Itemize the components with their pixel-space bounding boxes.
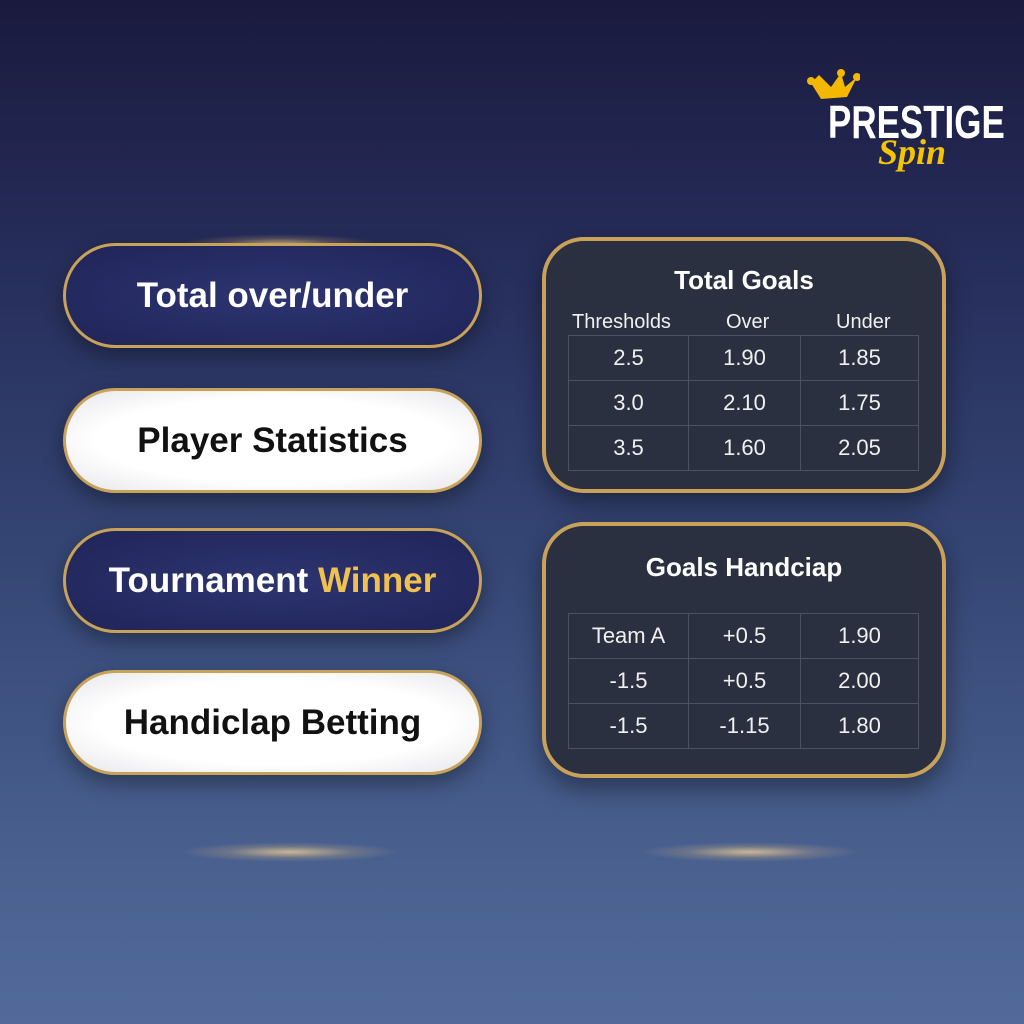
column headers [572,311,890,333]
table: 1.75 [838,390,881,415]
pill: Tournament Winner [63,528,482,633]
pill: Tournament Winner: Tournament [109,560,308,600]
pill: Player Statistics: Player Statistics [137,420,408,460]
logo text: PRESTIGE [828,96,1005,148]
table: 2.10 [723,390,766,415]
column headers: Under [836,311,890,333]
table: -1.15 [719,713,770,738]
pill: Total over/under: Total over/under [137,276,408,314]
table: 1.80 [838,713,881,738]
column headers: Thresholds [572,311,671,333]
table: 1.60 [723,435,766,460]
pill: Player Statistics [63,388,482,493]
panel: Total Goals [542,237,946,493]
heading: Goals Handciap [646,552,842,582]
table [568,613,919,749]
pill: Handiclap Betting [63,670,482,775]
table: 2.5 [613,345,644,370]
table: +0.5 [723,623,766,648]
table: 2.05 [838,435,881,460]
table [568,335,919,471]
glow decorations [180,234,380,254]
pill: Handiclap Betting: Handiclap Betting [124,702,421,742]
table: 2.00 [838,668,881,693]
table: 3.5 [613,435,644,460]
logo: Spin [878,132,946,172]
column headers: Over [726,311,769,333]
table: -1.5 [610,713,647,738]
table: Team A [592,623,665,648]
table: +0.5 [723,668,766,693]
table: -1.5 [610,668,647,693]
table: 3.0 [613,390,644,415]
icon: crown [807,69,860,99]
pill: Tournament Winner: Winner [318,560,436,600]
table: 1.90 [838,623,881,648]
table: 1.85 [838,345,881,370]
table: 1.90 [723,345,766,370]
panel: Goals Handicap [542,522,946,778]
heading: Total Goals [674,265,814,295]
pill: Total over/under [63,243,482,348]
logo [807,69,1005,172]
